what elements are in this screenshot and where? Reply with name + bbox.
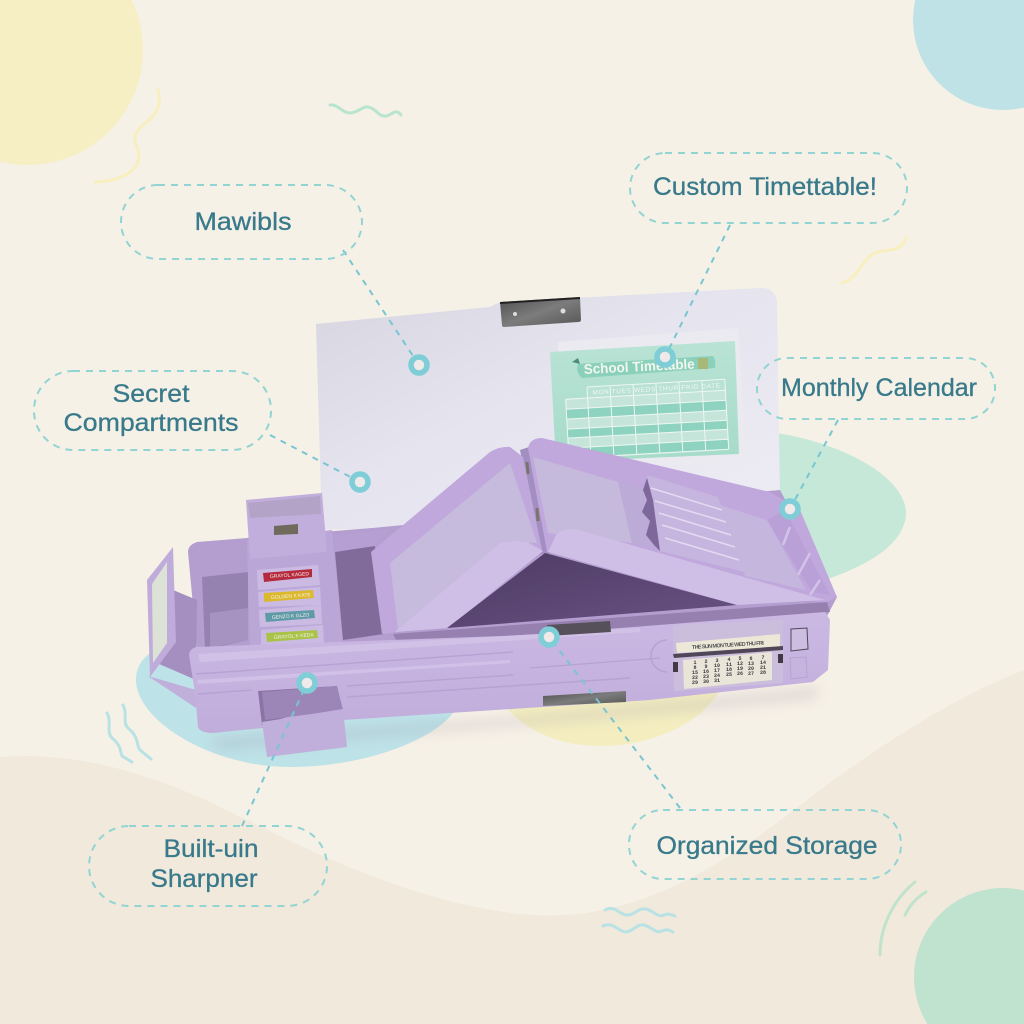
callout: Secret Compartments: Secret	[112, 380, 190, 408]
base rim	[393, 602, 830, 648]
timetable card	[550, 341, 739, 462]
date card: 23	[703, 674, 709, 680]
date card: 19	[737, 666, 743, 672]
squiggle: yellow left	[95, 90, 159, 182]
callout: Organized Storage: Organized Storage	[656, 832, 878, 860]
pen ridges	[642, 475, 744, 572]
green label	[266, 630, 318, 642]
label text: GRAYOL KAGED	[270, 571, 310, 580]
date card: 4	[727, 657, 731, 663]
yellow corner circle	[0, 0, 143, 165]
bottom clasp	[543, 691, 626, 706]
date card: 2	[704, 659, 708, 665]
left compartment floor	[210, 608, 248, 648]
date card: 1	[693, 660, 697, 666]
squiggle: yellow right	[842, 238, 906, 283]
date card: 9	[704, 664, 708, 670]
dark interior	[447, 553, 737, 628]
weekday header: MON TUES WEDS THUR FRID DATE	[592, 383, 721, 397]
date card: 12	[737, 661, 743, 667]
weekday strip	[676, 634, 780, 653]
lid clip	[500, 297, 581, 327]
squiggle: bottom teal	[603, 908, 675, 932]
leader: Secret Compartments	[270, 435, 360, 482]
leader: Monthly Calendar	[790, 420, 838, 509]
label text	[270, 571, 315, 641]
date card: 8	[693, 665, 697, 671]
red label	[263, 569, 312, 582]
marker: Organized Storage	[541, 629, 557, 645]
date card: 14	[760, 660, 766, 666]
callout: Secret Compartments: Compartments	[64, 409, 238, 437]
label tower	[246, 493, 343, 650]
date card: 18	[726, 667, 732, 673]
clear pocket	[558, 328, 747, 470]
left compartment	[202, 572, 248, 650]
middle compartment	[335, 546, 384, 640]
date card: 29	[692, 680, 698, 686]
label tiles	[257, 565, 324, 648]
clear window	[248, 496, 321, 518]
flap seam	[520, 446, 550, 554]
date card: 31	[714, 678, 720, 684]
callout: Monthly Calendar: Monthly Calendar	[781, 374, 977, 402]
date card: 20	[748, 666, 754, 672]
timetable banner	[577, 356, 715, 378]
callout: Monthly Calendar	[757, 358, 995, 419]
date card	[683, 652, 772, 689]
marker: Monthly Calendar	[782, 501, 798, 517]
marker: Secret Compartments	[352, 474, 368, 490]
callout: Custom Timettable	[630, 153, 907, 223]
date card: 5	[738, 656, 742, 662]
front fold strip	[548, 529, 825, 605]
side ribs	[783, 527, 820, 595]
open lid	[316, 288, 780, 530]
callout: Mawibls: Mawibls	[194, 208, 292, 236]
blue label	[265, 610, 315, 622]
date card: 22	[692, 675, 698, 681]
date card: 17	[714, 668, 720, 674]
leader: Mawibls	[343, 250, 419, 365]
sharpener drawer	[262, 686, 347, 757]
pencil box	[147, 288, 837, 757]
flip top	[246, 493, 327, 559]
blue blob	[136, 640, 460, 767]
date card: 7	[761, 655, 765, 661]
product shadow	[210, 686, 820, 750]
date card: 13	[748, 661, 754, 667]
marker: Built-in Sharpener	[299, 675, 315, 691]
squiggle: bottom right arcs	[880, 882, 926, 955]
leader: Built-in Sharpener	[242, 683, 307, 826]
flap hinges	[527, 462, 538, 521]
yellow label	[264, 590, 314, 602]
right inner flap	[528, 438, 837, 605]
date card: 3	[715, 658, 719, 664]
timetable grid	[565, 379, 729, 459]
label text: GENZO K GLZO	[272, 612, 310, 621]
date card: 11	[726, 662, 732, 668]
slider switch	[791, 628, 808, 651]
date card: 6	[749, 656, 753, 662]
date card: 28	[760, 670, 766, 676]
blue corner circle	[913, 0, 1024, 110]
date card: 27	[748, 671, 754, 677]
leader: Organized Storage	[549, 637, 680, 808]
date card: 25	[726, 672, 732, 678]
marker: Custom Timetable	[657, 349, 673, 365]
date card: 10	[714, 663, 720, 669]
mint blob	[760, 432, 906, 590]
timetable title: School Timetable	[583, 356, 695, 377]
date card: 24	[714, 673, 720, 679]
callout: Mawibls	[121, 185, 362, 259]
small button	[790, 657, 807, 679]
callout: Secret Compartments	[34, 371, 271, 450]
callout: Custom Timettable: Custom Timettable!	[653, 173, 877, 201]
date card: 21	[760, 665, 766, 671]
green corner circle	[914, 888, 1024, 1024]
date card: 26	[737, 671, 743, 677]
squiggle: top teal	[330, 105, 401, 116]
date card: 30	[703, 679, 709, 685]
mirror card	[152, 562, 167, 663]
metal sharpener slot	[274, 524, 298, 535]
leader: Custom Timetable	[665, 225, 730, 357]
calendar panel	[673, 620, 808, 691]
callout: Built-uin Sharpner	[89, 826, 327, 906]
left inner flap	[371, 447, 543, 634]
calendar tabs	[673, 654, 783, 672]
top clasp	[547, 621, 611, 636]
drawer cavity	[258, 686, 340, 725]
label text: GOLDEN X KATE	[271, 592, 312, 601]
callout: Built-uin Sharpner: Sharpner	[150, 865, 258, 893]
date card: 15	[692, 670, 698, 676]
banner leaf icon	[572, 358, 580, 364]
yellow blob	[500, 690, 720, 746]
rear interior	[188, 490, 837, 680]
calendar panel: THE SUN MON TUE WED THU FRI	[692, 641, 764, 651]
left fold-out card	[147, 547, 197, 708]
banner note icon	[698, 358, 708, 369]
label text: GRAYOL K KEDA	[274, 632, 315, 641]
marker: Mawibls	[411, 357, 427, 373]
date card: 16	[703, 669, 709, 675]
front body	[189, 612, 830, 733]
bottom wave	[0, 670, 1024, 1024]
squiggle: left teal	[107, 705, 151, 762]
rear rim by lid	[333, 530, 388, 552]
callout: Organized Storage	[629, 810, 901, 879]
callout: Built-uin Sharpner: Built-uin	[164, 835, 258, 863]
